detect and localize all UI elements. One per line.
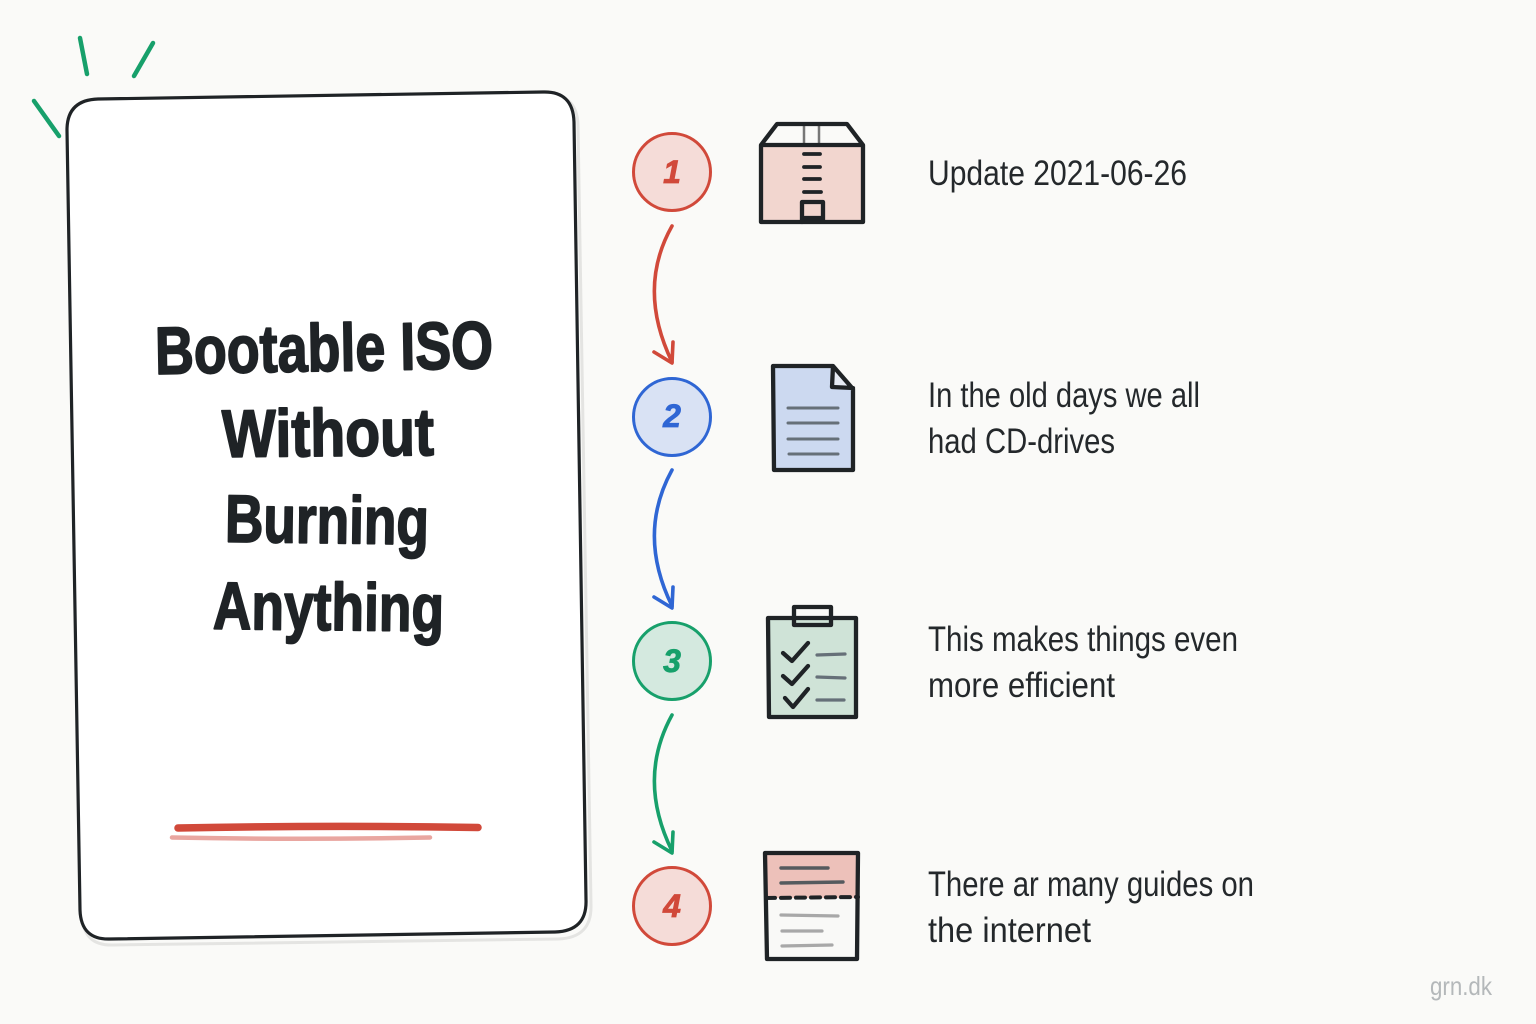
heading: title xyxy=(154,308,494,646)
watermark: grn.dk xyxy=(1430,971,1493,1001)
accent: green spark marks xyxy=(34,38,153,136)
text: step 1: Update 2021-06-26 xyxy=(928,154,1187,193)
text: step 2: had CD-drives xyxy=(928,422,1115,461)
text: step 4 xyxy=(928,865,1254,950)
text: step 2: In the old days we all xyxy=(928,376,1200,415)
step 1 badge xyxy=(634,134,710,210)
text: step 4: the internet xyxy=(928,911,1091,950)
step 2 badge xyxy=(634,378,710,456)
step 1 badge: 1 xyxy=(663,154,681,190)
heading: title: Anything xyxy=(213,569,444,646)
heading: title: Without xyxy=(222,395,434,472)
text: step 3 xyxy=(928,620,1238,705)
text: step 3: more efficient xyxy=(928,666,1115,705)
step 3 badge xyxy=(634,622,710,700)
icon: document xyxy=(773,366,853,470)
text: step 2 xyxy=(928,376,1200,461)
text: step 4: There ar many guides on xyxy=(928,865,1254,904)
underline: red strokes xyxy=(172,826,478,839)
icon: torn article xyxy=(765,853,858,959)
heading: title: Bootable ISO xyxy=(154,308,494,389)
icon: box xyxy=(761,124,863,222)
arrow: step 3 to 4 xyxy=(654,715,673,853)
panel: title card xyxy=(67,92,591,945)
step 3 badge: 3 xyxy=(663,643,681,679)
step 4 badge: 4 xyxy=(662,888,681,924)
heading: title: Burning xyxy=(224,482,430,559)
text: step 3: This makes things even xyxy=(928,620,1238,659)
arrow: step 1 to 2 xyxy=(654,226,673,363)
icon: checklist xyxy=(768,607,856,717)
step 2 badge: 2 xyxy=(662,398,681,434)
step 4 badge xyxy=(634,868,710,944)
arrow: step 2 to 3 xyxy=(654,470,673,608)
